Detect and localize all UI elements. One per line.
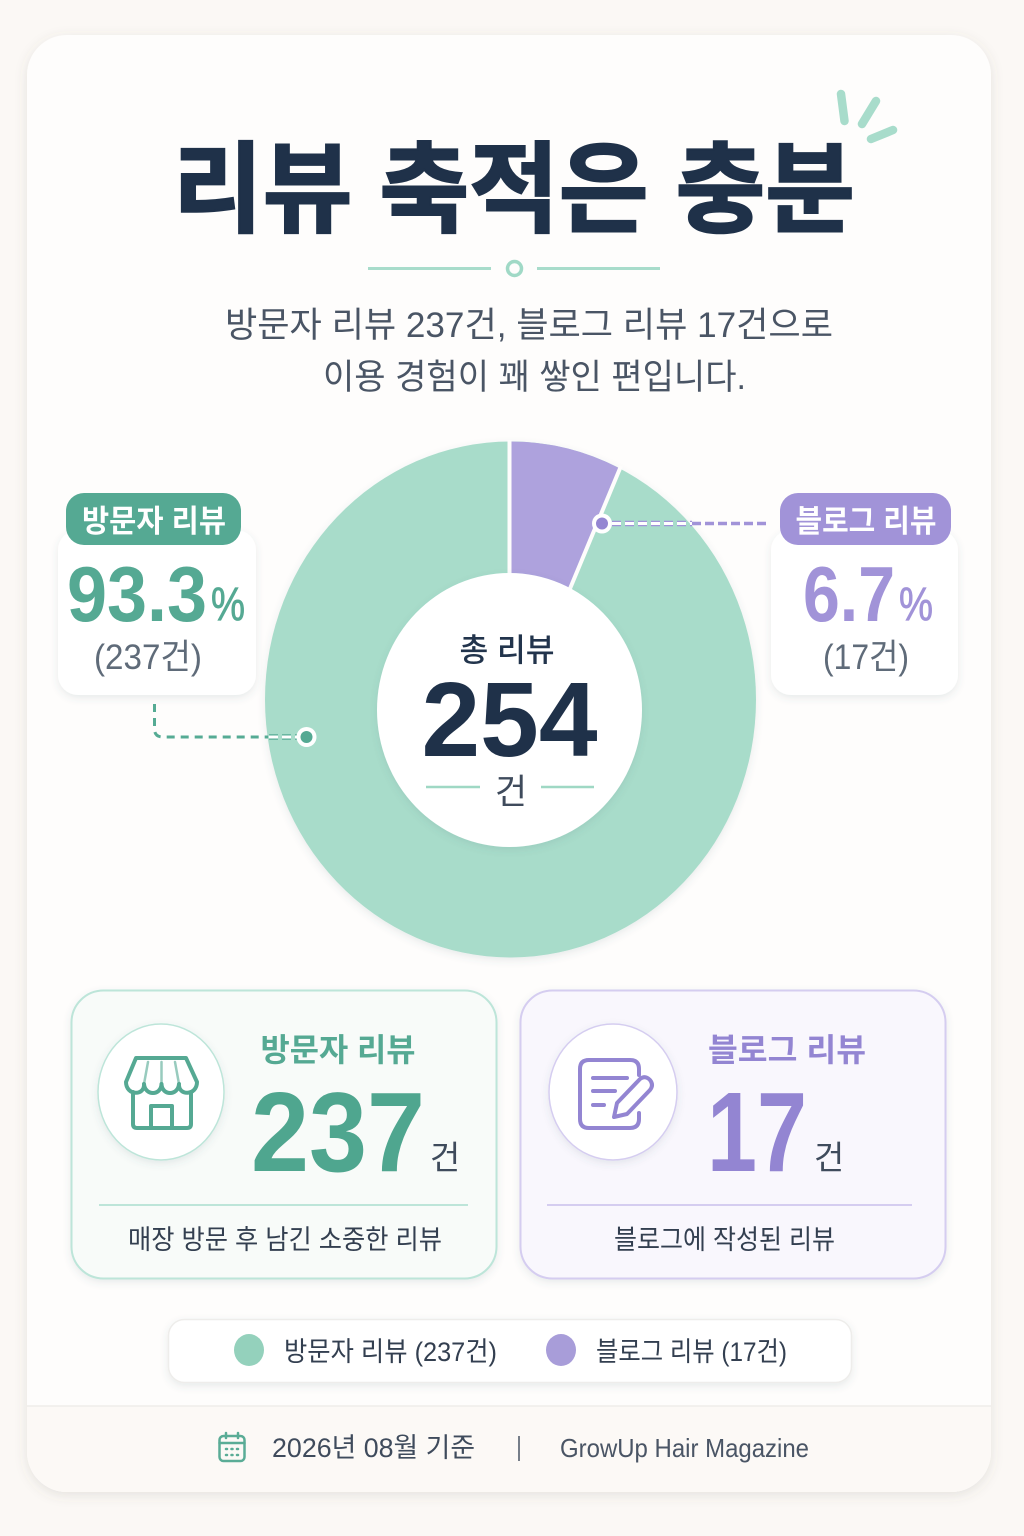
legend <box>168 1320 852 1382</box>
callout: visitor reviews: % <box>211 577 245 630</box>
callout: visitor reviews <box>58 493 256 695</box>
callout pill <box>66 493 241 545</box>
callout: blog reviews <box>771 493 958 695</box>
segment separators <box>510 440 621 591</box>
card description: 매장 방문 후 남긴 소중한 리뷰 <box>128 1225 442 1255</box>
percentage: 6.7 <box>803 550 895 638</box>
callout: blog reviews: % <box>899 577 933 630</box>
legend item: blog reviews <box>546 1334 787 1367</box>
footer source: GrowUp Hair Magazine <box>560 1433 809 1463</box>
callout card <box>771 530 958 695</box>
pill label: 블로그 리뷰 <box>796 504 936 539</box>
percentage: 93.3 <box>67 550 207 638</box>
centre label: 총 리뷰 <box>460 632 554 668</box>
centre total: 254 <box>422 661 598 779</box>
card unit: 건 <box>430 1139 460 1176</box>
panel: blog reviews <box>520 990 946 1278</box>
card heading: 블로그 리뷰 <box>708 1032 866 1068</box>
card heading: 방문자 리뷰 <box>260 1032 416 1068</box>
donut chart <box>265 440 756 958</box>
icon: note and pencil <box>549 1024 677 1160</box>
icon: store <box>98 1024 224 1160</box>
footer date: 2026년 08월 기준 <box>272 1433 475 1463</box>
panel: visitor reviews <box>72 990 496 1278</box>
subtitle: 이용 경험이 꽤 쌓인 편입니다. <box>323 358 746 397</box>
card unit: 건 <box>814 1139 844 1176</box>
connector: visitor reviews <box>154 704 316 747</box>
callout card <box>58 530 256 695</box>
title: 리뷰 축적은 충분 <box>173 134 855 245</box>
centre unit: 건 <box>495 773 527 812</box>
title divider <box>368 262 660 276</box>
segment: blog reviews 6.7% <box>510 441 620 600</box>
count: (17건) <box>823 638 909 677</box>
donut centre <box>377 573 642 847</box>
subtitle <box>225 306 833 397</box>
segment: visitor reviews 93.3% <box>265 442 756 958</box>
footer <box>220 1433 809 1463</box>
pill label: 방문자 리뷰 <box>82 504 226 539</box>
subtitle: 방문자 리뷰 237건, 블로그 리뷰 17건으로 <box>225 306 833 345</box>
card value: 237 <box>251 1069 425 1195</box>
legend item: blog reviews: 블로그 리뷰 (17건) <box>596 1337 787 1367</box>
card description: 블로그에 작성된 리뷰 <box>614 1225 835 1255</box>
icon: calendar <box>220 1433 244 1461</box>
count: (237건) <box>94 638 202 677</box>
callout pill <box>780 493 951 545</box>
card value: 17 <box>707 1069 807 1195</box>
icon: sparkle accent <box>841 94 893 139</box>
connector: blog reviews <box>592 514 766 534</box>
legend item: visitor reviews: 방문자 리뷰 (237건) <box>284 1337 497 1367</box>
